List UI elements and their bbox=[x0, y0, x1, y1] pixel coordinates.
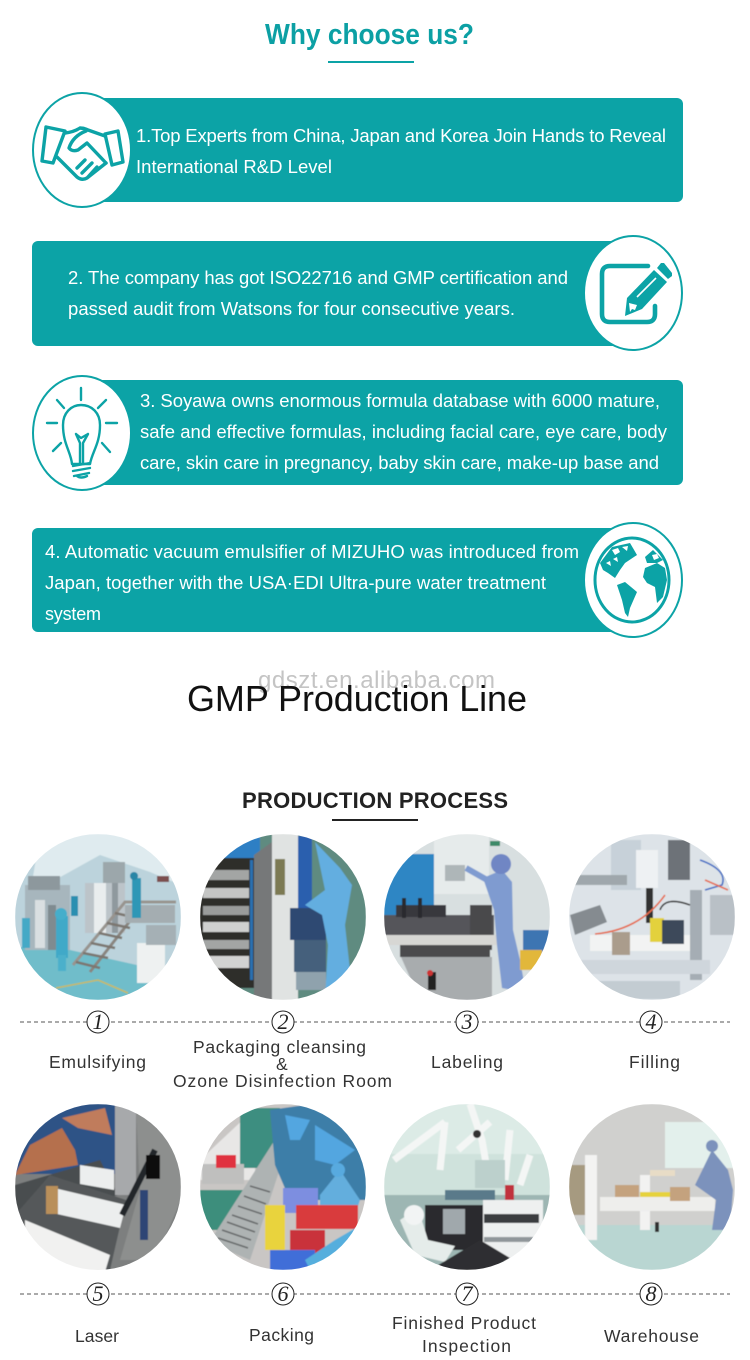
step marker 2 bbox=[272, 1009, 294, 1034]
step marker 7: 7 bbox=[462, 1281, 474, 1306]
photo: packaging cleansing and ozone room bbox=[200, 834, 366, 1000]
photo: finished product inspection bbox=[384, 1104, 550, 1270]
step marker 2: 2 bbox=[278, 1009, 288, 1034]
label: Packaging cleansing and Ozone Disinfection Room bbox=[173, 1037, 392, 1091]
title: Why choose us: Why choose us? bbox=[265, 19, 474, 51]
panel: reason 4 bbox=[32, 523, 682, 637]
label: Packing: Packing bbox=[249, 1325, 314, 1345]
step marker 4 bbox=[640, 1009, 662, 1034]
icon: light bulb bbox=[47, 388, 117, 478]
panel: reason 2 bbox=[32, 236, 682, 350]
label: Packaging cleansing and Ozone Disinfection Room: Packaging cleansing bbox=[193, 1037, 366, 1057]
label: Laser: Laser bbox=[75, 1326, 119, 1346]
text: reason 4: Japan, together with the USA·EDI Ultra-pure water treatment bbox=[45, 572, 546, 593]
text: reason 2: 2. The company has got ISO22716 and GMP certification and bbox=[68, 267, 568, 288]
step marker 8 bbox=[640, 1281, 662, 1306]
step marker 6 bbox=[272, 1281, 294, 1306]
photo: emulsifying bbox=[15, 834, 181, 1000]
step marker 5: 5 bbox=[92, 1281, 104, 1306]
panel: reason 3 bbox=[33, 376, 683, 490]
label: Packaging cleansing and Ozone Disinfection Room: & bbox=[276, 1054, 288, 1074]
step marker 7 bbox=[456, 1281, 478, 1306]
text: reason 4: system bbox=[45, 604, 101, 624]
icon: globe bbox=[595, 538, 669, 622]
label: Emulsifying: Emulsifying bbox=[49, 1052, 146, 1072]
text: reason 4 bbox=[45, 541, 579, 624]
text: reason 3: safe and effective formulas, including facial care, eye care, body bbox=[140, 421, 668, 442]
icon: handshake bbox=[42, 127, 123, 179]
text: reason 4: 4. Automatic vacuum emulsifier of MIZUHO was introduced from bbox=[45, 541, 579, 562]
photo: labeling bbox=[384, 834, 550, 1000]
label: Warehouse: Warehouse bbox=[604, 1326, 699, 1346]
label: Finished Product Inspection: Finished Product bbox=[392, 1313, 536, 1333]
title underline bbox=[328, 61, 414, 63]
text: reason 1 bbox=[136, 125, 666, 177]
icon: pencil and pad bbox=[602, 263, 672, 322]
text: reason 3: care, skin care in pregnancy, baby skin care, make-up base and bbox=[140, 452, 659, 473]
step marker 1 bbox=[87, 1009, 109, 1034]
step marker 6: 6 bbox=[278, 1281, 288, 1306]
label: Filling: Filling bbox=[629, 1052, 680, 1072]
step marker 3: 3 bbox=[460, 1009, 472, 1034]
heading underline bbox=[332, 819, 418, 821]
heading: production process: PRODUCTION PROCESS bbox=[242, 788, 508, 813]
text: reason 1: 1.Top Experts from China, Japan and Korea Join Hands to Reveal bbox=[136, 125, 666, 146]
photo: warehouse bbox=[569, 1104, 735, 1270]
text: reason 2 bbox=[68, 267, 568, 319]
label: Finished Product Inspection bbox=[392, 1313, 536, 1356]
step marker 8: 8 bbox=[646, 1281, 656, 1306]
text: reason 3: 3. Soyawa owns enormous formula database with 6000 mature, bbox=[140, 390, 660, 411]
step marker 1: 1 bbox=[92, 1009, 104, 1034]
text: reason 2: passed audit from Watsons for four consecutive years. bbox=[68, 298, 515, 319]
watermark: gdszt.en.alibaba.com bbox=[258, 667, 495, 694]
label: Packaging cleansing and Ozone Disinfection Room: Ozone Disinfection Room bbox=[173, 1071, 392, 1091]
photo: packing bbox=[200, 1100, 366, 1270]
photo: filling bbox=[569, 834, 735, 1000]
label: Finished Product Inspection: Inspection bbox=[422, 1336, 511, 1356]
text: reason 1: International R&D Level bbox=[136, 156, 332, 177]
timeline row 1 bbox=[20, 1009, 730, 1034]
label: Labeling: Labeling bbox=[431, 1052, 503, 1072]
heading: GMP Production Line: GMP Production Line bbox=[187, 678, 527, 719]
step marker 3 bbox=[456, 1009, 478, 1034]
timeline row 2 bbox=[20, 1281, 730, 1306]
step marker 4: 4 bbox=[646, 1009, 656, 1034]
step marker 5 bbox=[87, 1281, 109, 1306]
panel: reason 1 bbox=[33, 93, 683, 207]
photo: laser bbox=[15, 1104, 181, 1272]
text: reason 3 bbox=[140, 390, 668, 473]
